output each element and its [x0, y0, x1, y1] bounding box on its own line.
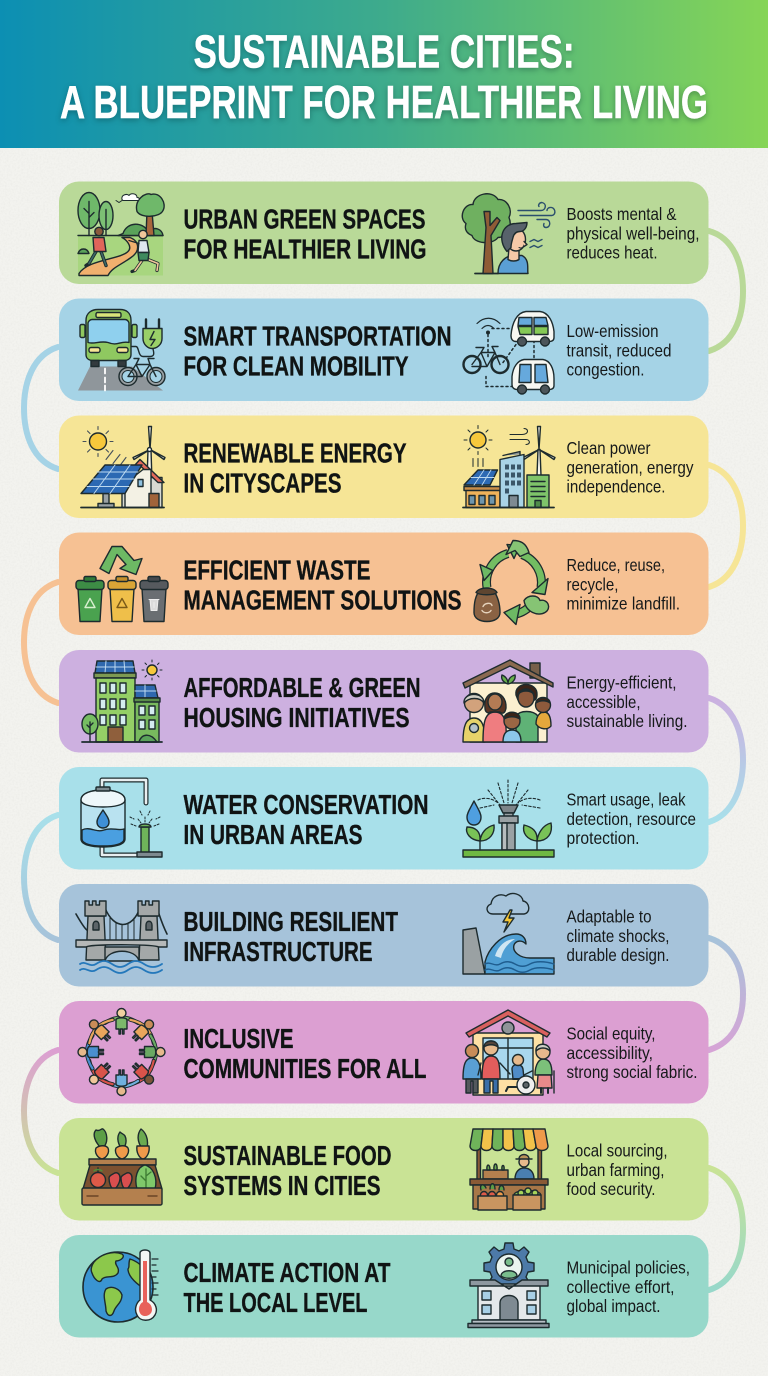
heading [184, 554, 462, 616]
description: congestion. [566, 360, 644, 380]
icon: green apartment building [82, 660, 162, 742]
card background [59, 767, 708, 870]
description: Low-emission [566, 321, 658, 341]
description: transit, reduced [566, 340, 672, 360]
heading: SYSTEMS IN CITIES [184, 1170, 380, 1201]
icon: person breathing by a tree [462, 194, 555, 274]
heading [184, 1140, 392, 1201]
description: Adaptable to [566, 906, 652, 926]
description: climate shocks, [566, 926, 670, 946]
connector: card 9 to 10 [709, 1168, 743, 1290]
description: recycle, [566, 574, 618, 594]
heading: CLIMATE ACTION AT [184, 1257, 391, 1288]
heading: INCLUSIVE [184, 1023, 294, 1054]
description: Reduce, reuse, [566, 555, 665, 575]
heading [184, 789, 428, 850]
panel: smart transportation [59, 298, 708, 401]
description [566, 906, 670, 965]
description: physical well-being, [566, 224, 700, 244]
icon: electric bus and bike [78, 310, 165, 390]
heading: IN CITYSCAPES [184, 468, 342, 498]
heading: MANAGEMENT SOLUTIONS [184, 584, 462, 616]
heading [184, 438, 406, 498]
description: durable design. [566, 945, 670, 965]
description: protection. [566, 828, 640, 848]
heading: RENEWABLE ENERGY [184, 438, 406, 468]
panel: resilient infrastructure [59, 884, 708, 986]
card background [59, 416, 708, 518]
heading: FOR CLEAN MOBILITY [184, 350, 408, 382]
description [566, 1258, 690, 1316]
heading: HOUSING INITIATIVES [184, 702, 410, 733]
description [566, 204, 700, 262]
connector: card 1 to 2 [709, 231, 743, 351]
description [566, 321, 672, 380]
description: Local sourcing, [566, 1140, 668, 1160]
connector: card 2 to 3 [24, 347, 58, 469]
description: sustainable living. [566, 711, 688, 731]
description: Social equity, [566, 1024, 656, 1044]
icon: park with runners [78, 192, 164, 276]
description: global impact. [566, 1296, 660, 1316]
heading: SMART TRANSPORTATION [184, 320, 452, 352]
description: accessible, [566, 692, 640, 712]
panel: renewable energy [59, 416, 708, 518]
heading: BUILDING RESILIENT [184, 906, 398, 937]
heading: IN URBAN AREAS [184, 819, 362, 850]
heading [184, 204, 426, 264]
icon: connected vehicles [464, 312, 554, 394]
description [566, 1024, 698, 1082]
heading: FOR HEALTHIER LIVING [184, 234, 426, 264]
heading: THE LOCAL LEVEL [184, 1287, 368, 1318]
icon: garden sprinkler and plants [463, 780, 554, 857]
icon: recycling loop with compost sack [474, 540, 549, 624]
heading: EFFICIENT WASTE [184, 554, 370, 586]
icon: solar panel, turbine and house [81, 426, 165, 508]
icon: suspension bridge [76, 901, 167, 973]
description [566, 438, 694, 496]
heading [184, 1257, 391, 1318]
icon: globe and thermometer [83, 1250, 158, 1322]
icon: circle of people holding hands [78, 1008, 165, 1096]
description: collective effort, [566, 1277, 674, 1297]
heading [184, 672, 420, 733]
icon: storm, dam and wave [463, 894, 554, 974]
icon: water tank and sprinkler [81, 780, 162, 857]
description: generation, energy [566, 458, 694, 478]
description [566, 672, 688, 731]
heading [184, 906, 398, 967]
icon: recycling bins [76, 546, 168, 622]
panel: affordable and green housing [59, 650, 708, 752]
card background [59, 884, 708, 986]
heading: SUSTAINABLE FOOD [184, 1140, 392, 1171]
connector: card 7 to 8 [709, 938, 743, 1050]
description: reduces heat. [566, 242, 658, 262]
description [566, 555, 680, 614]
panel: inclusive communities [59, 1001, 708, 1104]
heading: COMMUNITIES FOR ALL [184, 1053, 426, 1084]
panel: urban green spaces [59, 182, 708, 284]
connector: card 3 to 4 [709, 465, 743, 587]
connector: card 5 to 6 [709, 698, 743, 822]
description [566, 790, 696, 848]
description: Smart usage, leak [566, 790, 686, 810]
card background [59, 532, 708, 635]
icon: family under a roof [463, 660, 553, 742]
connector: card 8 to 9 [24, 1050, 58, 1173]
icon: crate of vegetables [82, 1129, 162, 1205]
description: Clean power [566, 438, 651, 458]
description [566, 1140, 668, 1199]
card background [59, 182, 708, 284]
description: Energy-efficient, [566, 672, 676, 692]
heading: URBAN GREEN SPACES [184, 204, 426, 234]
card background [59, 1118, 708, 1220]
heading: AFFORDABLE & GREEN [184, 672, 420, 703]
description: accessibility, [566, 1043, 653, 1063]
panel: efficient waste management [59, 532, 708, 635]
panel: sustainable food systems [59, 1118, 708, 1220]
description: detection, resource [566, 809, 696, 829]
icon: market stall [470, 1129, 548, 1210]
description: strong social fabric. [566, 1062, 698, 1082]
description: urban farming, [566, 1160, 664, 1180]
description: independence. [566, 476, 666, 496]
description: Boosts mental & [566, 204, 677, 224]
title banner: SUSTAINABLE CITIES: [194, 26, 574, 78]
heading: WATER CONSERVATION [184, 789, 428, 820]
heading [184, 1023, 426, 1084]
connector: card 4 to 5 [24, 582, 58, 703]
connector: card 6 to 7 [24, 815, 58, 940]
description: minimize landfill. [566, 594, 680, 614]
card background [59, 298, 708, 401]
icon: community house with diverse people [463, 1010, 554, 1095]
heading [184, 320, 452, 382]
panel: climate action [59, 1235, 708, 1338]
description: Municipal policies, [566, 1258, 690, 1278]
panel: water conservation [59, 767, 708, 870]
description: food security. [566, 1179, 656, 1199]
card background [59, 1001, 708, 1104]
card background [59, 1235, 708, 1338]
heading: INFRASTRUCTURE [184, 936, 372, 967]
icon: city hall with gear [468, 1243, 549, 1328]
card background [59, 650, 708, 752]
icon: city with clean energy [463, 426, 555, 508]
title banner [0, 0, 768, 148]
